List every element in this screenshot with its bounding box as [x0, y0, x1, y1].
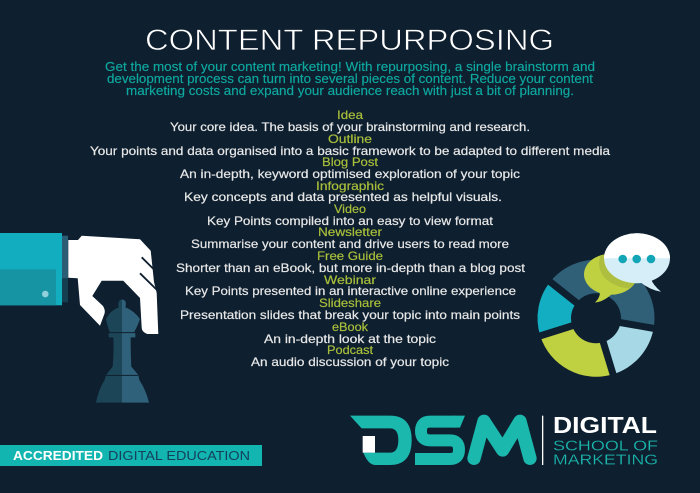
intro text block: development process can turn into several pieces of content. Reduce your content: [107, 72, 594, 86]
icon: typing dots: [618, 255, 655, 263]
item: free guide: [176, 249, 526, 275]
item: podcast: Podcast: [327, 343, 374, 357]
list of content formats: [90, 108, 610, 369]
logo wordmark: DIGITAL: [553, 412, 657, 438]
item: infographic: Infographic: [316, 179, 384, 193]
icon: chess piece: [96, 299, 149, 403]
item: slideshare: Slideshare: [319, 296, 381, 310]
item: webinar: Key Points presented in an interactive online experience: [185, 284, 516, 298]
item: newsletter: Summarise your content and drive users to read more: [191, 237, 509, 251]
item: infographic: Key concepts and data presented as helpful visuals.: [184, 190, 502, 204]
logo wordmark: MARKETING: [553, 452, 658, 468]
item: podcast: [251, 343, 449, 369]
logo: DSM Digital School of Marketing: [350, 412, 658, 468]
item: ebook: [264, 320, 436, 346]
item: webinar: [185, 273, 516, 298]
icon: hand with suit cuff: [0, 233, 158, 334]
item: podcast: An audio discussion of your topic: [251, 355, 449, 369]
item: slideshare: Presentation slides that break your topic into main points: [180, 308, 520, 322]
item: idea: Idea: [337, 108, 363, 122]
item: free guide: Shorter than an eBook, but more in-depth than a blog post: [176, 261, 526, 275]
banner: accredited digital education: ACCREDITED: [13, 448, 103, 463]
item: outline: [90, 132, 610, 158]
item: idea: Your core idea. The basis of your brainstorming and research.: [170, 120, 530, 134]
item: video: [207, 202, 494, 228]
icon: segmented donut chart: [535, 260, 660, 379]
item: video: Key Points compiled into an easy to view format: [207, 214, 494, 228]
logo mark: DSM letters: [350, 416, 543, 465]
logo wordmark: SCHOOL OF: [553, 438, 658, 454]
item: blog post: [180, 155, 520, 181]
item: newsletter: Newsletter: [318, 225, 382, 239]
item: blog post: An in-depth, keyword optimised exploration of your topic: [180, 167, 520, 181]
item: video: Video: [334, 202, 366, 216]
item: slideshare: [180, 296, 520, 322]
item: infographic: [184, 179, 502, 204]
banner: accredited digital education: [0, 445, 262, 466]
item: outline: Outline: [328, 132, 372, 146]
item: outline: Your points and data organised into a basic framework to be adapted to different media: [90, 144, 610, 158]
intro text block: Get the most of your content marketing! With repurposing, a single brainstorm and: [105, 60, 595, 74]
banner: accredited digital education: DIGITAL EDUCATION: [108, 448, 250, 463]
intro text block: [105, 60, 595, 98]
item: blog post: Blog Post: [322, 155, 379, 169]
item: idea: [170, 108, 530, 134]
icon: speech bubbles: [584, 233, 670, 302]
item: ebook: An in-depth look at the topic: [264, 332, 436, 346]
item: newsletter: [191, 225, 509, 251]
logo wordmark: [553, 412, 658, 468]
intro text block: marketing costs and expand your audience reach with just a bit of planning.: [126, 84, 574, 98]
title: CONTENT REPURPOSING: [145, 24, 554, 57]
item: webinar: Webinar: [324, 273, 376, 287]
item: ebook: eBook: [332, 320, 369, 334]
item: free guide: Free Guide: [317, 249, 383, 263]
